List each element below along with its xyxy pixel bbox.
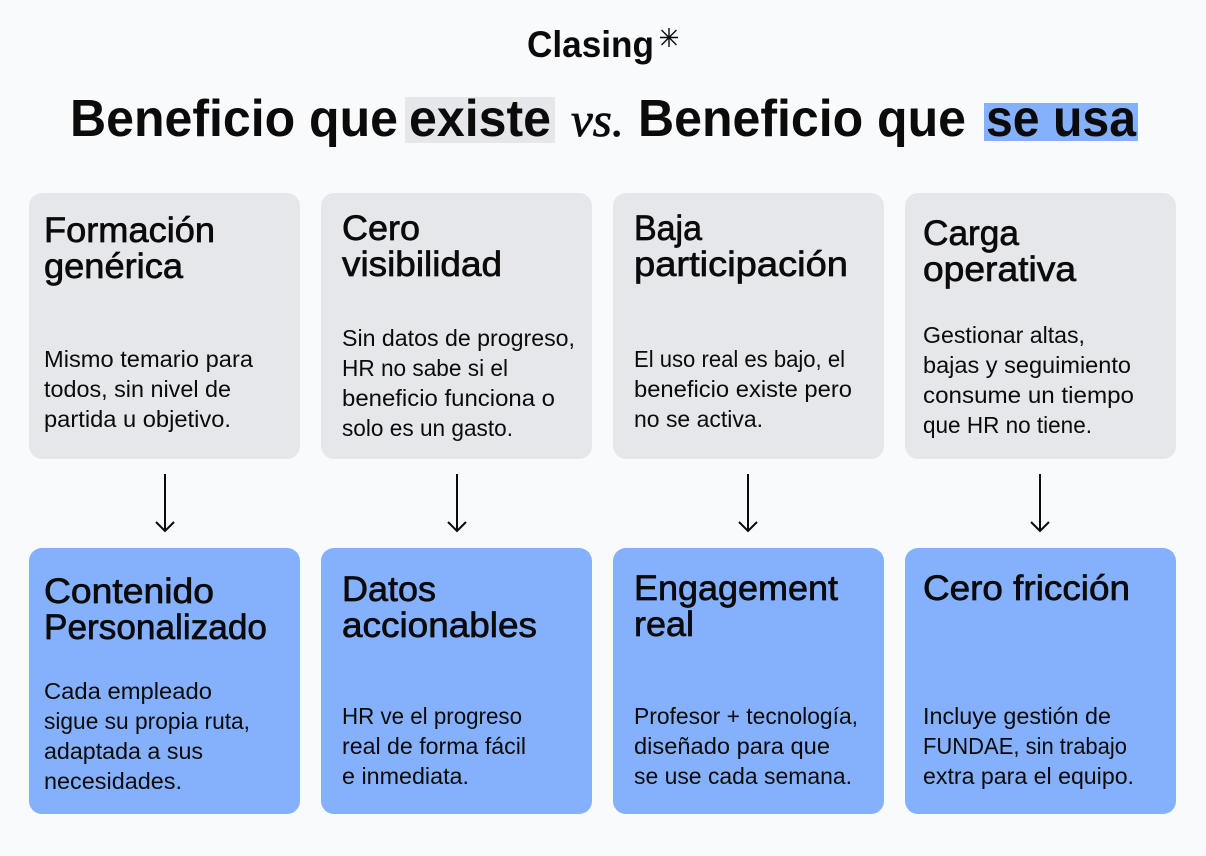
highlight: existe xyxy=(405,97,555,143)
title: Beneficio que xyxy=(70,90,398,148)
heading: Cero visibilidad: visibilidad xyxy=(342,245,502,284)
text: description: FUNDAE, sin trabajo xyxy=(923,733,1127,759)
text: description: extra para el equipo. xyxy=(923,763,1134,789)
highlight: se usa xyxy=(984,103,1138,141)
text: description: HR no sabe si el xyxy=(342,355,508,381)
icon: logo asterisk xyxy=(660,28,678,47)
heading: Baja participación: participación xyxy=(634,245,848,284)
text: description: partida u objetivo. xyxy=(44,406,231,432)
title xyxy=(70,90,1138,148)
panel: Contenido Personalizado xyxy=(29,548,300,814)
text: description: Gestionar altas, xyxy=(923,322,1085,348)
arrow: column 2 xyxy=(448,474,466,531)
heading: Engagement real: Engagement xyxy=(634,569,838,608)
heading: Datos accionables xyxy=(342,570,537,645)
heading: Formación genérica xyxy=(44,211,215,286)
text: description: HR ve el progreso xyxy=(342,703,522,729)
heading: Carga operativa: Carga xyxy=(923,214,1020,253)
text: description: Incluye gestión de xyxy=(923,703,1111,729)
title: se usa xyxy=(986,90,1137,148)
text: description: Mismo temario para xyxy=(44,346,253,372)
panel: Datos accionables xyxy=(321,548,592,814)
heading: Cero visibilidad: Cero xyxy=(342,209,420,248)
text: description: real de forma fácil xyxy=(342,733,526,759)
panel: Cero visibilidad xyxy=(321,193,592,459)
text: description xyxy=(44,678,250,794)
heading: Contenido Personalizado xyxy=(44,572,267,647)
heading: Datos accionables: Datos xyxy=(342,570,436,609)
heading: Baja participación xyxy=(634,209,848,284)
text: description: e inmediata. xyxy=(342,763,469,789)
panel: Baja participación xyxy=(613,193,884,459)
arrow: column 3 xyxy=(739,474,757,531)
panel: Cero fricción xyxy=(905,548,1176,814)
heading: Engagement real xyxy=(634,569,838,644)
text: description: Profesor + tecnología, xyxy=(634,703,858,729)
heading: Formación genérica: Formación xyxy=(44,211,215,250)
arrow: column 4 xyxy=(1031,474,1049,531)
text: description xyxy=(923,703,1134,789)
panel: Formación genérica xyxy=(29,193,300,459)
heading: Contenido Personalizado: Contenido xyxy=(44,572,214,611)
text: description: todos, sin nivel de xyxy=(44,376,231,402)
logo: Clasing: Clasing xyxy=(527,24,654,65)
heading: Baja participación: Baja xyxy=(634,209,703,248)
heading: Formación genérica: genérica xyxy=(44,247,184,286)
text: description: beneficio funciona o xyxy=(342,385,555,411)
text: description xyxy=(44,346,253,432)
heading: Cero fricción: Cero fricción xyxy=(923,569,1130,608)
text: description xyxy=(342,703,526,789)
text: description: beneficio existe pero xyxy=(634,376,852,402)
text: description: necesidades. xyxy=(44,768,182,794)
text: description: Cada empleado xyxy=(44,678,212,704)
text: description: sigue su propia ruta, xyxy=(44,708,250,734)
text: description xyxy=(923,322,1134,438)
title: Beneficio que xyxy=(638,90,966,148)
text: description: solo es un gasto. xyxy=(342,415,513,441)
panel: Engagement real xyxy=(613,548,884,814)
text: description: consume un tiempo xyxy=(923,382,1134,408)
heading: Datos accionables: accionables xyxy=(342,606,537,645)
text: description: se use cada semana. xyxy=(634,763,852,789)
title: vs. xyxy=(571,94,624,147)
text: description: Sin datos de progreso, xyxy=(342,325,575,351)
heading: Engagement real: real xyxy=(634,605,694,644)
text: description: no se activa. xyxy=(634,406,763,432)
text: description: que HR no tiene. xyxy=(923,412,1092,438)
title: existe xyxy=(409,90,551,148)
heading: Carga operativa: operativa xyxy=(923,250,1077,289)
heading: Carga operativa xyxy=(923,214,1077,289)
panel: Carga operativa xyxy=(905,193,1176,459)
text: description: adaptada a sus xyxy=(44,738,203,764)
text: description: El uso real es bajo, el xyxy=(634,346,845,372)
arrow: column 1 xyxy=(156,474,174,531)
text: description: bajas y seguimiento xyxy=(923,352,1131,378)
text: description: diseñado para que xyxy=(634,733,830,759)
heading: Contenido Personalizado: Personalizado xyxy=(44,608,267,647)
text: description xyxy=(634,703,858,789)
text: description xyxy=(342,325,575,441)
text: description xyxy=(634,346,852,432)
heading: Cero visibilidad xyxy=(342,209,502,284)
